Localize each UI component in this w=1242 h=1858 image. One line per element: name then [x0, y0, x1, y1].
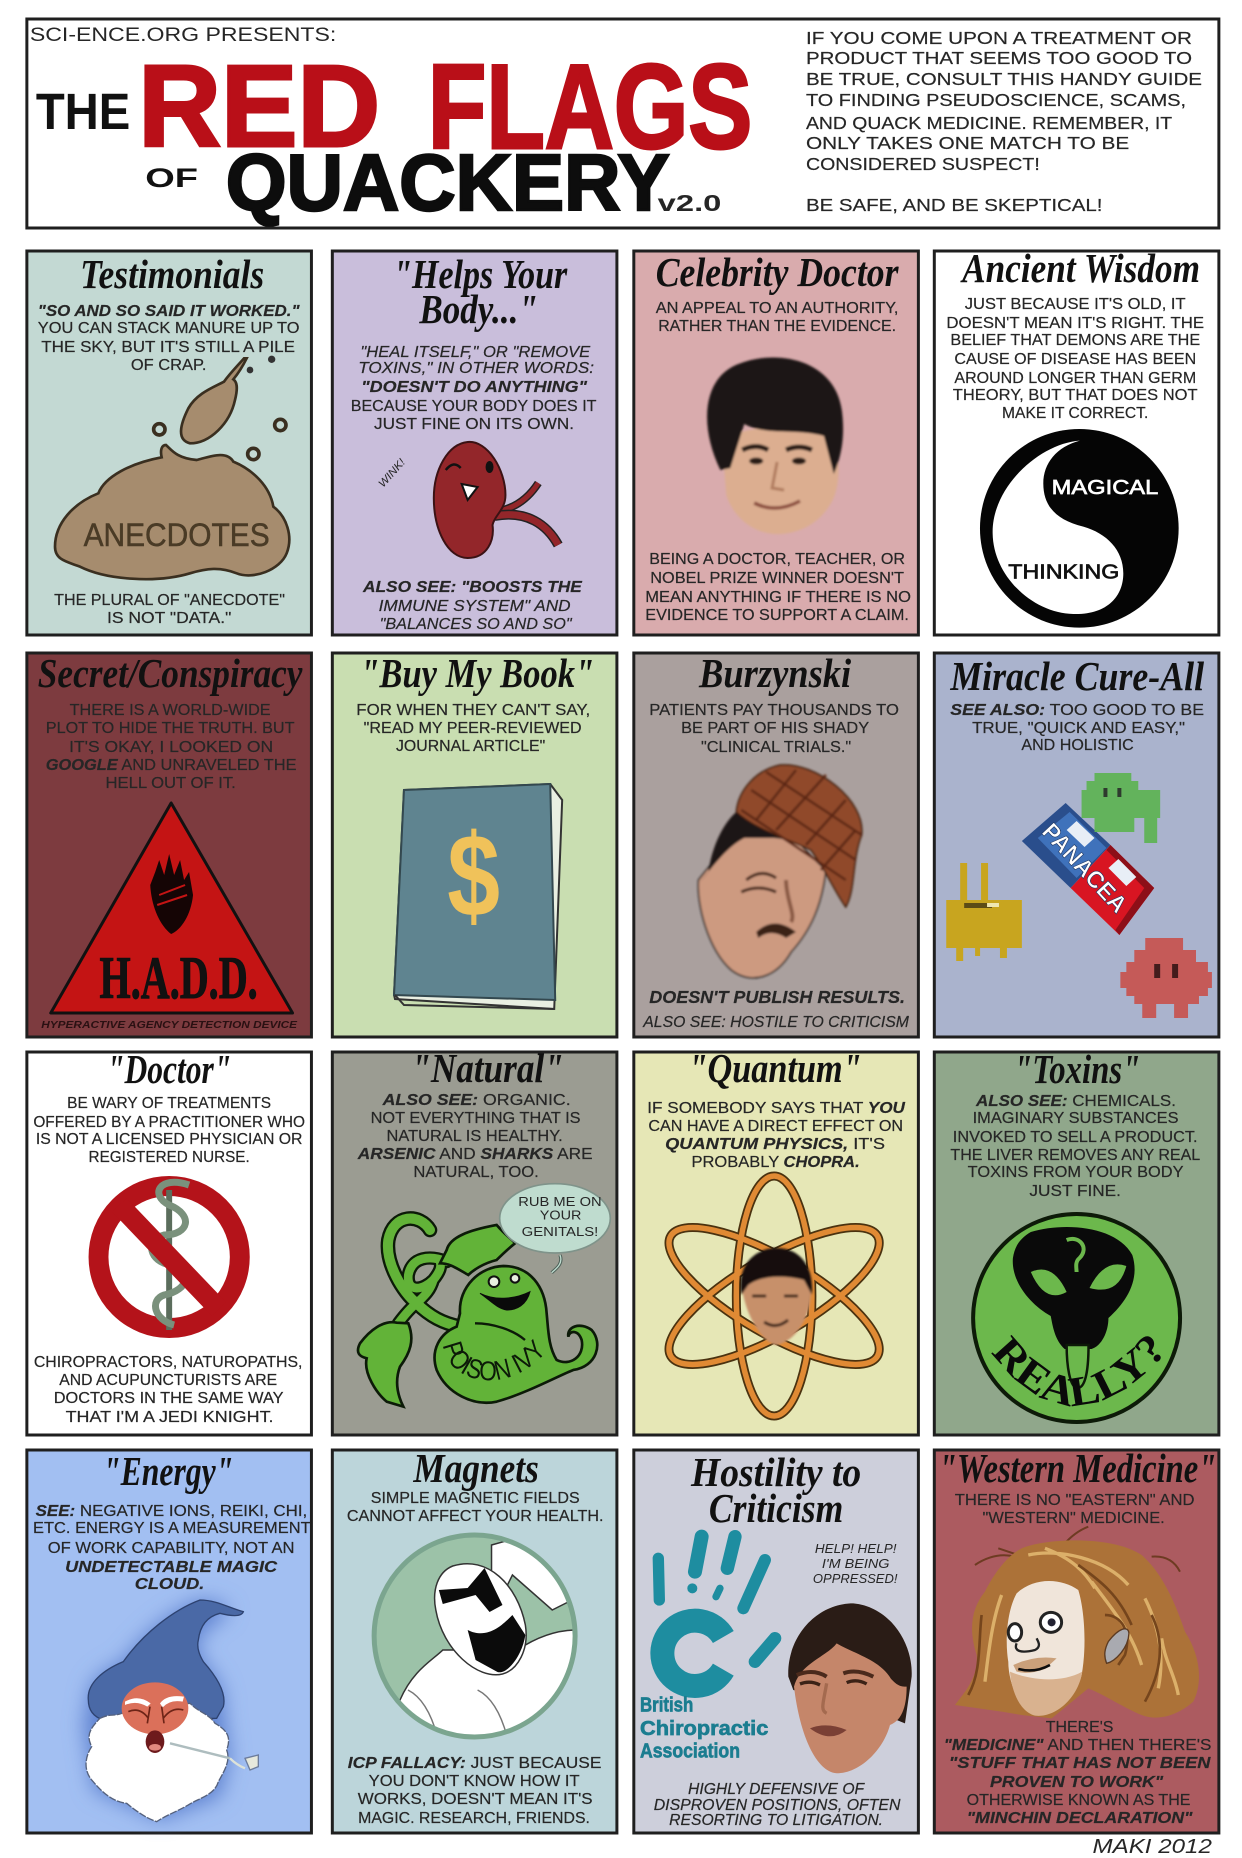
- title: RED: [138, 41, 380, 171]
- panel: quantum: [634, 1046, 918, 1435]
- body text: [656, 300, 898, 335]
- icon: chiropractic association logo: [640, 1537, 775, 1762]
- body text: IS NOT A LICENSED PHYSICIAN OR: [36, 1131, 302, 1148]
- body text: "HEAL ITSELF," OR "REMOVE: [360, 344, 591, 361]
- heading: Celebrity Doctor: [656, 250, 899, 295]
- body text: PLOT TO HIDE THE TRUTH. BUT: [46, 720, 295, 737]
- body text: [46, 702, 297, 792]
- heading: Burzynski: [698, 651, 852, 696]
- footer text: THAT I'M A JEDI KNIGHT.: [66, 1409, 274, 1426]
- icon: skull badge: REALLY?: [991, 1335, 1161, 1407]
- title: QUACKERY: [226, 138, 670, 227]
- footer text: [348, 1755, 601, 1827]
- icon: skull badge: [971, 1212, 1182, 1424]
- intro text: AND QUACK MEDICINE. REMEMBER, IT: [806, 113, 1172, 133]
- heading: Hostility to: [690, 1450, 861, 1495]
- body text: [357, 1092, 593, 1181]
- body text: THERE IS NO "EASTERN" AND: [955, 1492, 1194, 1509]
- icon: yellow pixel monster: [946, 863, 1022, 961]
- icon: HADD warning triangle: H.A.D.D.: [99, 945, 258, 1011]
- icon: chiropractic association logo: Chiropractic: [640, 1717, 768, 1740]
- presenter line: SCI-ENCE.ORG PRESENTS:: [30, 25, 336, 46]
- heading: [393, 252, 568, 332]
- footer text: BEING A DOCTOR, TEACHER, OR: [649, 551, 905, 568]
- icon: red pixel monster: [1120, 938, 1212, 1018]
- icon: doctor face: [707, 358, 843, 534]
- body text: FOR WHEN THEY CAN'T SAY,: [356, 702, 590, 719]
- footer text: HIGHLY DEFENSIVE OF: [688, 1781, 865, 1798]
- title: FLAGS: [428, 41, 752, 174]
- icon: yin-yang magical thinking: THINKING: [1008, 561, 1119, 583]
- body text: NOT EVERYTHING THAT IS: [371, 1110, 581, 1127]
- footer text: IS NOT "DATA.": [107, 610, 231, 627]
- footer text: RESORTING TO LITIGATION.: [669, 1812, 883, 1829]
- heading: "Helps Your: [393, 252, 568, 297]
- icon: poison ivy character: POISON IVY: [443, 1339, 542, 1380]
- intro text: [806, 28, 1202, 215]
- icon: HADD warning triangle: [51, 803, 293, 1013]
- footer text: EVIDENCE TO SUPPORT A CLAIM.: [645, 607, 909, 624]
- body text: ETC. ENERGY IS A MEASUREMENT: [33, 1520, 311, 1537]
- title: OF: [145, 163, 198, 193]
- body text: AND HOLISTIC: [1021, 737, 1134, 754]
- intro text: ONLY TAKES ONE MATCH TO BE: [806, 133, 1129, 153]
- body text: INVOKED TO SELL A PRODUCT.: [953, 1129, 1198, 1146]
- footer text: THERE'S: [1046, 1719, 1113, 1736]
- body text: [33, 1095, 305, 1166]
- body text: OF CRAP.: [131, 357, 206, 374]
- icon: book with dollar sign: [394, 784, 562, 1009]
- heading: "Toxins": [1014, 1047, 1140, 1092]
- body text: [351, 344, 597, 433]
- body text: "WESTERN" MEDICINE.: [983, 1510, 1165, 1527]
- intro text: TO FINDING PSEUDOSCIENCE, SCAMS,: [806, 90, 1186, 110]
- panel: doctor: [27, 1047, 311, 1435]
- intro text: IF YOU COME UPON A TREATMENT OR: [806, 28, 1192, 48]
- body text: TOXINS FROM YOUR BODY: [968, 1164, 1184, 1181]
- body text: THERE IS A WORLD-WIDE: [70, 702, 271, 719]
- icon: book with dollar sign: $: [447, 809, 500, 941]
- body text: PATIENTS PAY THOUSANDS TO: [649, 702, 899, 719]
- body text: AN APPEAL TO AN AUTHORITY,: [656, 300, 898, 317]
- body text: BELIEF THAT DEMONS ARE THE: [950, 332, 1200, 349]
- speech caption: [813, 1541, 898, 1586]
- icon: clown figure in ring: [374, 1535, 587, 1738]
- footer text: OTHERWISE KNOWN AS THE: [967, 1792, 1191, 1809]
- footer text: PROVEN TO WORK": [990, 1774, 1164, 1791]
- title: [36, 41, 752, 227]
- icon: kidney: [434, 442, 558, 558]
- footer text: "BALANCES SO AND SO": [380, 616, 573, 633]
- body text: AROUND LONGER THAN GERM: [954, 370, 1196, 387]
- body text: IMAGINARY SUBSTANCES: [973, 1110, 1179, 1127]
- body text: QUANTUM PHYSICS, IT'S: [665, 1136, 885, 1153]
- body text: "DOESN'T DO ANYTHING": [361, 379, 588, 396]
- body text: THE SKY, BUT IT'S STILL A PILE: [41, 339, 295, 356]
- heading: Testimonials: [80, 252, 264, 297]
- intro text: BE TRUE, CONSULT THIS HANDY GUIDE: [806, 69, 1202, 89]
- body text: [33, 1503, 311, 1593]
- speech caption: I'M BEING: [822, 1556, 890, 1571]
- body text: BE PART OF HIS SHADY: [681, 720, 869, 737]
- panel: hostility to criticism: [634, 1450, 918, 1833]
- intro text: BE SAFE, AND BE SKEPTICAL!: [806, 195, 1102, 215]
- body text: CANNOT AFFECT YOUR HEALTH.: [347, 1508, 604, 1525]
- footer text: "STUFF THAT HAS NOT BEEN: [949, 1755, 1211, 1772]
- body text: YOU CAN STACK MANURE UP TO: [38, 320, 299, 337]
- body text: OFFERED BY A PRACTITIONER WHO: [33, 1114, 305, 1131]
- body text: PROBABLY CHOPRA.: [692, 1154, 860, 1171]
- body text: [647, 1100, 905, 1171]
- body text: "READ MY PEER-REVIEWED: [364, 720, 582, 737]
- footer text: [54, 592, 285, 627]
- panel: helps your body: [332, 251, 617, 635]
- body text: [950, 1093, 1200, 1200]
- device caption: HYPERACTIVE AGENCY DETECTION DEVICE: [41, 1020, 298, 1031]
- body text: HELL OUT OF IT.: [105, 775, 236, 792]
- footer text: [645, 551, 911, 624]
- body text: TOXINS," IN OTHER WORDS:: [358, 360, 594, 377]
- footer text: AND ACUPUNCTURISTS ARE: [59, 1372, 277, 1389]
- body text: SEE ALSO: TOO GOOD TO BE: [950, 702, 1204, 719]
- body text: SEE: NEGATIVE IONS, REIKI, CHI,: [36, 1503, 307, 1520]
- body text: [347, 1490, 604, 1525]
- icon: poison ivy character: RUB ME ON: [518, 1195, 602, 1209]
- icon: panacea pill: PANACEA: [1036, 818, 1132, 919]
- footer text: DOCTORS IN THE SAME WAY: [54, 1390, 284, 1407]
- speech caption: HELP! HELP!: [815, 1541, 897, 1556]
- body text: THE LIVER REMOVES ANY REAL: [950, 1147, 1200, 1164]
- footer text: [362, 579, 583, 633]
- footer text: DISPROVEN POSITIONS, OFTEN: [654, 1797, 901, 1814]
- icon: chiropractic association logo: Association: [640, 1739, 740, 1762]
- body text: BE WARY OF TREATMENTS: [67, 1095, 271, 1112]
- wink caption: WINK!: [376, 457, 408, 490]
- panel: celebrity doctor: [634, 250, 918, 635]
- body text: IF SOMEBODY SAYS THAT YOU: [647, 1100, 905, 1117]
- heading: Ancient Wisdom: [960, 246, 1200, 291]
- body text: JUST FINE ON ITS OWN.: [374, 416, 574, 433]
- body text: BECAUSE YOUR BODY DOES IT: [351, 398, 597, 415]
- icon: yin-yang magical thinking: MAGICAL: [1052, 477, 1158, 499]
- body text: [38, 303, 300, 374]
- heading: Miracle Cure-All: [949, 654, 1205, 699]
- body text: JOURNAL ARTICLE": [396, 738, 545, 755]
- panel: magnets: [332, 1446, 617, 1833]
- intro text: CONSIDERED SUSPECT!: [806, 154, 1040, 174]
- body text: JUST BECAUSE IT'S OLD, IT: [965, 296, 1186, 313]
- body text: MAKE IT CORRECT.: [1002, 405, 1148, 422]
- intro text: PRODUCT THAT SEEMS TOO GOOD TO: [806, 48, 1192, 68]
- panel: burzynski: [634, 651, 918, 1037]
- panel: ancient wisdom: [934, 246, 1219, 635]
- icon: chiropractic association logo: British: [640, 1694, 693, 1717]
- footer text: DOESN'T PUBLISH RESULTS.: [649, 987, 905, 1007]
- heading: Magnets: [413, 1446, 539, 1491]
- heading: "Natural": [411, 1046, 564, 1091]
- footer text: YOU DON'T KNOW HOW IT: [369, 1773, 580, 1790]
- panel: secret conspiracy: [27, 651, 311, 1037]
- panel: toxins: [932, 1047, 1220, 1436]
- body text: RATHER THAN THE EVIDENCE.: [658, 318, 896, 335]
- footer text: "MINCHIN DECLARATION": [967, 1810, 1193, 1827]
- body text: NATURAL IS HEALTHY.: [387, 1128, 563, 1145]
- body text: "SO AND SO SAID IT WORKED.": [38, 303, 300, 320]
- body text: [356, 702, 590, 755]
- heading: "Doctor": [107, 1047, 231, 1092]
- icon: wizard: [83, 1600, 258, 1822]
- body text: CAN HAVE A DIRECT EFFECT ON: [648, 1118, 903, 1135]
- icon: prohibited rod of asclepius: [99, 1182, 240, 1330]
- body text: "CLINICAL TRIALS.": [701, 739, 851, 756]
- heading: "Quantum": [689, 1046, 862, 1091]
- body text: CLOUD.: [135, 1576, 204, 1593]
- footer text: "MEDICINE" AND THEN THERE'S: [944, 1737, 1211, 1754]
- panel: energy: [27, 1449, 311, 1833]
- body text: [950, 702, 1204, 754]
- label: anecdotes: ANECDOTES: [84, 517, 270, 553]
- footer text: [944, 1719, 1211, 1827]
- icon: man's face: [788, 1603, 912, 1773]
- footer text: [642, 987, 910, 1031]
- panel: miracle cure-all: [934, 653, 1219, 1037]
- icon: face with brown cap: [698, 765, 862, 978]
- footer text: THE PLURAL OF "ANECDOTE": [54, 592, 285, 609]
- icon: poison ivy character: [356, 1183, 611, 1409]
- heading: [690, 1450, 861, 1531]
- title: v2.0: [658, 190, 721, 216]
- icon: poison ivy character: YOUR: [540, 1208, 581, 1222]
- icon: poison ivy character: GENITALS!: [522, 1225, 598, 1239]
- icon: long-haired caricature: [955, 1527, 1199, 1718]
- icon: falling pile: [55, 356, 289, 579]
- body text: JUST FINE.: [1029, 1183, 1121, 1200]
- footer text: IMMUNE SYSTEM" AND: [379, 598, 571, 615]
- heading: Secret/Conspiracy: [38, 651, 303, 696]
- icon: green pixel monster: [1082, 773, 1160, 843]
- footer text: [654, 1781, 901, 1829]
- body text: TRUE, "QUICK AND EASY,": [972, 720, 1185, 737]
- footer text: MEAN ANYTHING IF THERE IS NO: [645, 589, 911, 606]
- body text: NATURAL, TOO.: [413, 1164, 539, 1181]
- title: THE: [36, 83, 130, 140]
- panel: western medicine: [934, 1446, 1219, 1833]
- body text: [946, 296, 1204, 422]
- icon: atom with face: [652, 1176, 896, 1416]
- header panel: [27, 19, 1219, 228]
- heading: "Energy": [103, 1449, 233, 1494]
- body text: ARSENIC AND SHARKS ARE: [357, 1146, 593, 1163]
- footer text: CHIROPRACTORS, NATUROPATHS,: [34, 1354, 302, 1371]
- body text: DOESN'T MEAN IT'S RIGHT. THE: [946, 315, 1204, 332]
- heading: "Buy My Book": [360, 651, 594, 696]
- speech caption: OPPRESSED!: [813, 1571, 898, 1586]
- panel: natural: [330, 1046, 618, 1436]
- body text: THEORY, BUT THAT DOES NOT: [953, 387, 1198, 404]
- footer text: ALSO SEE: HOSTILE TO CRITICISM: [642, 1014, 910, 1031]
- body text: CAUSE OF DISEASE HAS BEEN: [954, 351, 1196, 368]
- body text: GOOGLE AND UNRAVELED THE: [46, 757, 297, 774]
- icon: yin-yang magical thinking: [980, 429, 1179, 628]
- heading: Criticism: [709, 1486, 843, 1531]
- footer text: ICP FALLACY: JUST BECAUSE: [348, 1755, 601, 1772]
- icon: panacea pill: [1022, 803, 1154, 935]
- body text: SIMPLE MAGNETIC FIELDS: [371, 1490, 580, 1507]
- footer text: NOBEL PRIZE WINNER DOESN'T: [650, 570, 904, 587]
- panel: buy my book: [332, 651, 617, 1037]
- footer text: [34, 1354, 302, 1426]
- footer text: MAGIC. RESEARCH, FRIENDS.: [358, 1810, 590, 1827]
- panel: testimonials: [27, 251, 311, 635]
- body text: [649, 702, 899, 756]
- body text: ALSO SEE: ORGANIC.: [381, 1092, 571, 1109]
- body text: REGISTERED NURSE.: [89, 1149, 250, 1166]
- body text: OF WORK CAPABILITY, NOT AN: [48, 1540, 295, 1557]
- body text: [955, 1492, 1194, 1527]
- artist signature: MAKI 2012: [1093, 1836, 1212, 1858]
- footer text: WORKS, DOESN'T MEAN IT'S: [358, 1791, 593, 1808]
- body text: ALSO SEE: CHEMICALS.: [975, 1093, 1176, 1110]
- footer text: ALSO SEE: "BOOSTS THE: [362, 579, 583, 596]
- body text: UNDETECTABLE MAGIC: [65, 1559, 278, 1576]
- heading: Body...": [419, 287, 538, 332]
- body text: IT'S OKAY, I LOOKED ON: [69, 739, 273, 756]
